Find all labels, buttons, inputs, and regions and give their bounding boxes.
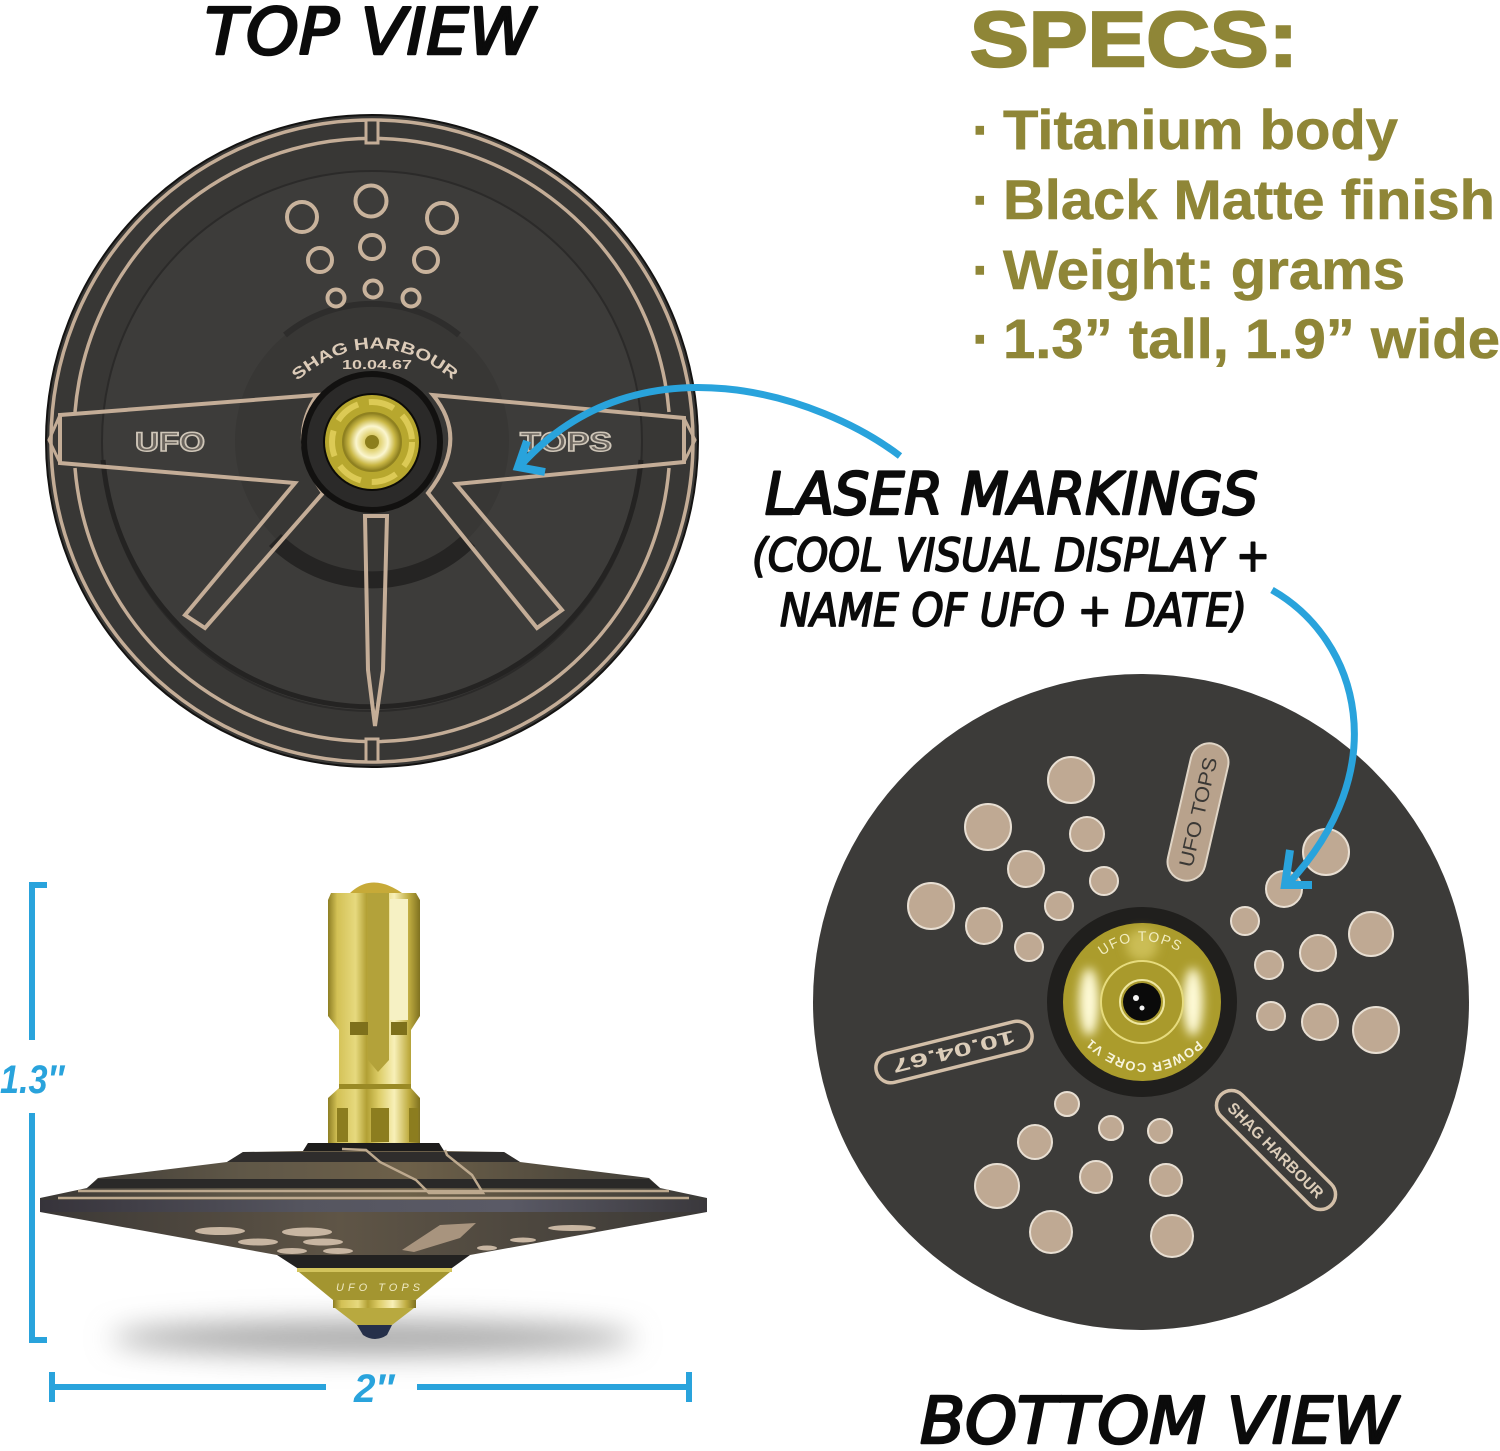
etched label: date: 10.04.67 — [342, 357, 412, 372]
hub text: UFO TOPS: UFO TOPS — [1098, 931, 1182, 954]
lower band — [277, 1255, 470, 1268]
dimension: width — [52, 1367, 689, 1411]
panel: side view of top — [40, 882, 707, 1355]
callout: laser markings — [752, 460, 1270, 637]
spec: dimensions: 1.3” tall, 1.9” wide — [1003, 307, 1500, 370]
arrow: to bottom view markings — [1272, 590, 1354, 885]
etched label: Shag Harbour: SHAG HARBOUR — [292, 338, 458, 380]
callout line 2: NAME OF UFO + DATE) — [780, 584, 1247, 637]
panel: top view disc — [45, 114, 699, 768]
height label: 1.3″ — [0, 1058, 66, 1102]
ball tip — [357, 1325, 392, 1339]
gold knob — [325, 395, 419, 489]
stem — [328, 882, 420, 1145]
dimension: height — [0, 885, 66, 1340]
pill: Shag Harbour — [1210, 1084, 1342, 1216]
saucer upper body — [40, 1143, 707, 1212]
outer etched rings — [51, 120, 693, 762]
spec: dimensions: · — [972, 307, 991, 370]
underside pill — [402, 1223, 476, 1252]
spec: titanium body: · — [972, 98, 991, 161]
callout heading: LASER MARKINGS — [765, 460, 1258, 528]
etched label: TOPS: TOPS — [520, 427, 612, 457]
spec: weight: Weight: grams — [1003, 238, 1405, 301]
ring notches — [49, 120, 695, 762]
gold ring — [333, 1300, 416, 1308]
pill: date — [873, 1018, 1035, 1086]
callout line 1: (COOL VISUAL DISPLAY + — [752, 529, 1270, 582]
panel: bottom view disc — [813, 674, 1469, 1330]
pill: date: 10.04.67 — [890, 1025, 1017, 1076]
ground shadow — [111, 1321, 635, 1355]
spec: weight: · — [972, 238, 991, 301]
etched label: UFO: UFO — [135, 427, 205, 457]
hub step — [235, 304, 509, 578]
width label: 2″ — [353, 1367, 396, 1411]
spec: black matte finish: · — [972, 168, 991, 231]
etched circles — [287, 186, 457, 306]
pill: UFO TOPS — [1164, 740, 1232, 884]
power core hub — [1047, 907, 1237, 1097]
tip label: UFO TOPS — [336, 1282, 421, 1294]
hub text: Power Core: POWER CORE V1 — [1087, 1039, 1203, 1072]
pill: UFO TOPS: UFO TOPS — [1176, 755, 1222, 869]
arrow: to top view markings — [518, 387, 900, 472]
saucer rim — [40, 1200, 707, 1212]
etched spokes — [60, 395, 684, 726]
gold tip cone — [297, 1268, 452, 1300]
underside dots — [195, 1225, 596, 1254]
pill: Shag Harbour: SHAG HARBOUR — [1224, 1100, 1327, 1203]
etched dots — [908, 757, 1399, 1257]
specs list — [972, 98, 1500, 370]
centre hub — [301, 371, 443, 513]
saucer etched lines — [58, 1149, 689, 1198]
saucer lower body — [40, 1212, 707, 1255]
spec: titanium body: Titanium body — [1003, 98, 1398, 161]
spec: black matte finish: Black Matte finish — [1003, 168, 1495, 231]
